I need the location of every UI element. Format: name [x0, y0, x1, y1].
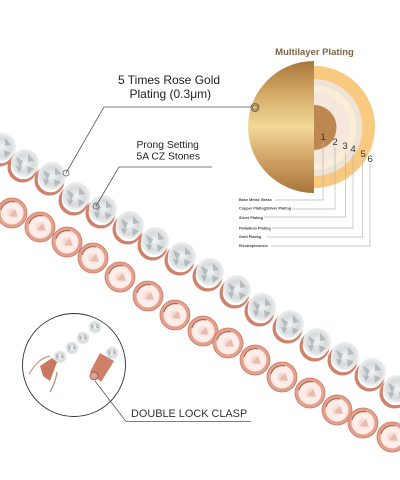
diagram: multilayer plating sphere: [239, 61, 375, 248]
layer numbers: [320, 132, 373, 165]
layer numbers: 6: [368, 154, 373, 165]
layer labels: Palladium Plating: [239, 226, 271, 230]
callout: prong setting: Prong Setting: [136, 140, 199, 151]
small stones left strand: [54, 320, 102, 364]
heading: Multilayer Plating: Multilayer Plating: [275, 47, 354, 58]
callout: double lock clasp: [95, 381, 251, 422]
clasp pieces: [29, 353, 114, 392]
layer numbers: 5: [360, 149, 366, 160]
layer leader lines: [264, 142, 370, 246]
layer numbers: 2: [332, 137, 338, 148]
callout: rose gold plating: Plating (0.3μm): [130, 87, 211, 101]
layer numbers: 1: [320, 132, 326, 143]
layer labels: Electrophoresis: [239, 244, 268, 248]
callout: prong setting: [93, 140, 212, 209]
bracelet: front view with stones: [0, 133, 400, 408]
layer labels: Copper Plating/Silver Plating: [239, 206, 292, 210]
layer numbers: 4: [350, 144, 356, 155]
bracelet: back view rose gold: [0, 198, 400, 452]
layer labels: [239, 198, 292, 248]
layer numbers: 3: [342, 141, 348, 152]
callout: double lock clasp: DOUBLE LOCK CLASP: [131, 408, 247, 420]
callout: rose gold plating: [63, 73, 259, 176]
layer labels: Gold Plating: [239, 235, 262, 239]
layer labels: Silver Plating: [239, 216, 264, 220]
small stones right strand: [106, 346, 118, 360]
callout: rose gold plating: 5 Times Rose Gold: [118, 73, 220, 87]
callout: clasp detail circle: [22, 314, 126, 416]
layer labels: Base Metal: Brass: [239, 198, 272, 202]
callout: prong setting: 5A CZ Stones: [136, 152, 200, 162]
